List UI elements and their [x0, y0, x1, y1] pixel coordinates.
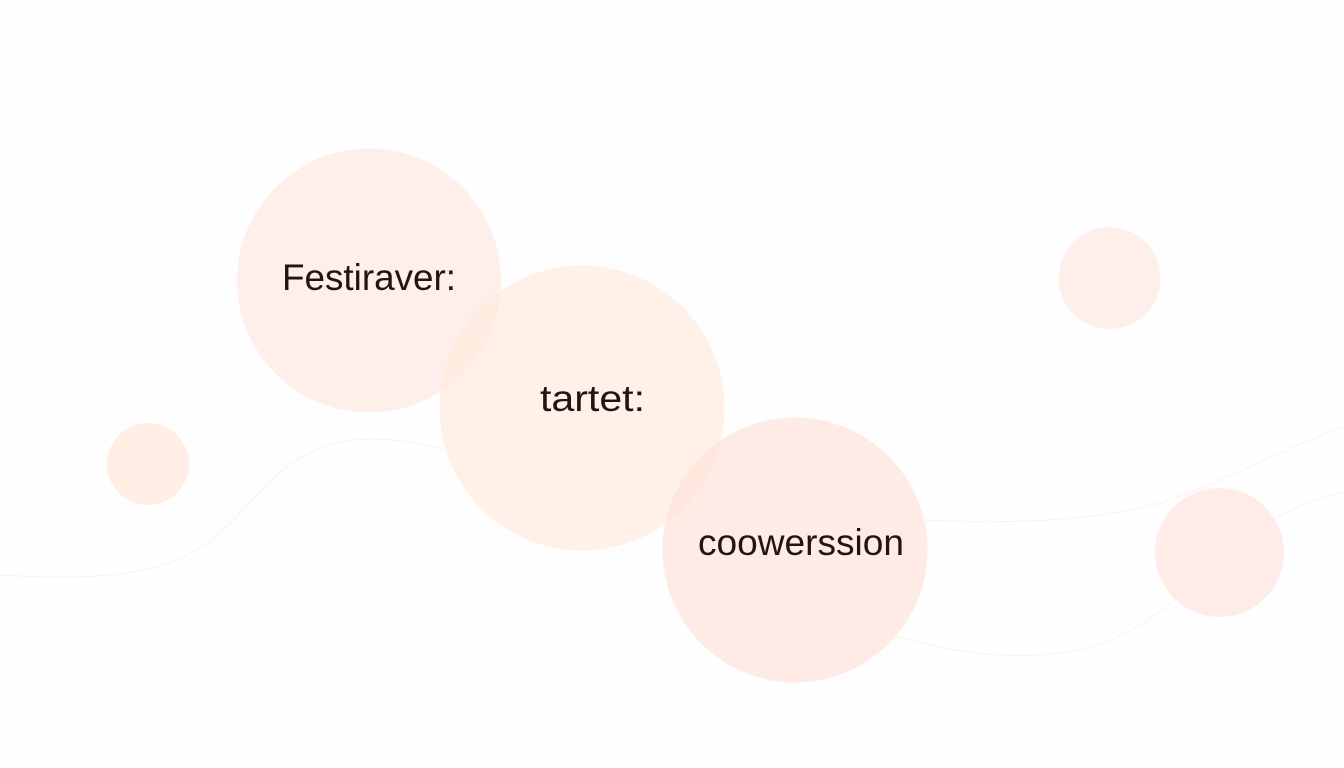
label: coowerssion: coowerssion: [698, 521, 904, 563]
label: Festiraver: Festiraver:: [282, 256, 456, 298]
connector line: right upper curve: [925, 427, 1344, 522]
circle: tartet: [440, 266, 724, 550]
label: tartet: tartet:: [540, 377, 645, 419]
connector line: far right curve: [1277, 492, 1344, 518]
decorative node: top right circle: [1058, 227, 1160, 329]
circle: Festiraver: [237, 148, 501, 412]
faint line inside lower right circle: [1175, 518, 1277, 600]
circle: coowerssion: [662, 418, 928, 682]
connector line: left curve: [0, 439, 445, 577]
decorative node: left circle: [107, 423, 189, 505]
faint line inside tartet circle: [445, 449, 660, 515]
connector line: right lower curve: [897, 600, 1175, 656]
decorative node: lower right circle: [1155, 488, 1284, 617]
